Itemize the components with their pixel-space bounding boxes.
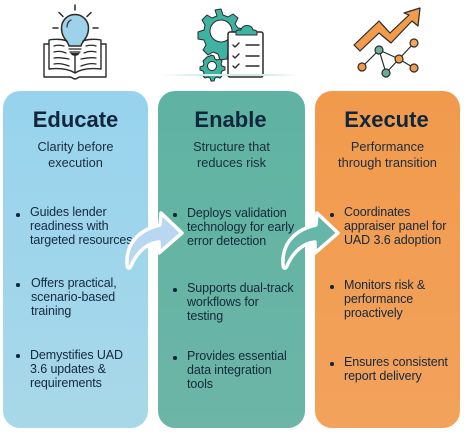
heading: Execute: Execute xyxy=(344,107,429,132)
bullets: Execute: proactively xyxy=(344,306,403,320)
bullets: Execute: report delivery xyxy=(344,369,422,383)
bullets: Enable xyxy=(173,206,294,391)
bullets: Enable: data integration xyxy=(187,363,272,377)
bullets: Educate: Demystifies UAD xyxy=(30,348,123,362)
subheading: Enable xyxy=(193,139,270,170)
bullets: Execute: performance xyxy=(344,292,413,306)
bullets: Enable: Deploys validation xyxy=(187,206,287,220)
text: requirements xyxy=(30,376,102,390)
heading: Enable: Enable xyxy=(194,107,267,132)
subheading: Execute xyxy=(338,139,437,170)
bullets: Educate: scenario-based xyxy=(31,290,115,304)
subheading: Execute: Performance xyxy=(351,139,424,154)
icon: rising arrow and network xyxy=(353,7,421,78)
bullets: Enable: error detection xyxy=(187,234,266,248)
panel: educate xyxy=(3,91,148,428)
bullets: Educate: targeted resources xyxy=(30,233,132,247)
bullets: Enable: technology for early xyxy=(187,220,294,234)
heading: Educate: Educate xyxy=(33,107,118,132)
subheading: Enable: Structure that xyxy=(193,139,270,154)
subheading: Educate: execution xyxy=(48,155,103,170)
bullets: Enable: testing xyxy=(187,309,223,323)
subheading: Educate xyxy=(37,139,114,170)
bullets: Educate: Offers practical, xyxy=(31,276,117,290)
panel: execute xyxy=(315,91,460,428)
text: tools xyxy=(187,377,213,391)
panel: enable xyxy=(158,91,305,428)
subheading: Execute: through transition xyxy=(338,155,437,170)
subheading: Educate: Clarity before xyxy=(37,139,114,154)
bullets: Enable: workflows for xyxy=(187,295,259,309)
bullets: Educate: 3.6 updates & xyxy=(30,362,106,376)
bullets: Execute: UAD 3.6 adoption xyxy=(344,233,441,247)
bullets: Execute: Monitors risk & xyxy=(344,278,425,292)
bullets: Enable: Supports dual-track xyxy=(187,281,294,295)
icon: gears and checklist xyxy=(198,8,264,82)
divider: faint line under gear icon xyxy=(160,74,300,76)
bullets: Educate: readiness with xyxy=(30,219,109,233)
bullets: Execute: Coordinates xyxy=(344,205,410,219)
bullets: Execute xyxy=(330,205,448,383)
bullets: Enable: Provides essential xyxy=(187,349,287,363)
bullets: Educate xyxy=(16,205,132,390)
bullets: Educate: Guides lender xyxy=(30,205,107,219)
subheading: Enable: reduces risk xyxy=(197,155,266,170)
icon: light bulb over open book xyxy=(43,4,107,80)
bullets: Educate: training xyxy=(31,304,71,318)
bullets: Execute: Ensures consistent xyxy=(344,355,448,369)
bullets: Execute: appraiser panel for xyxy=(344,219,446,233)
